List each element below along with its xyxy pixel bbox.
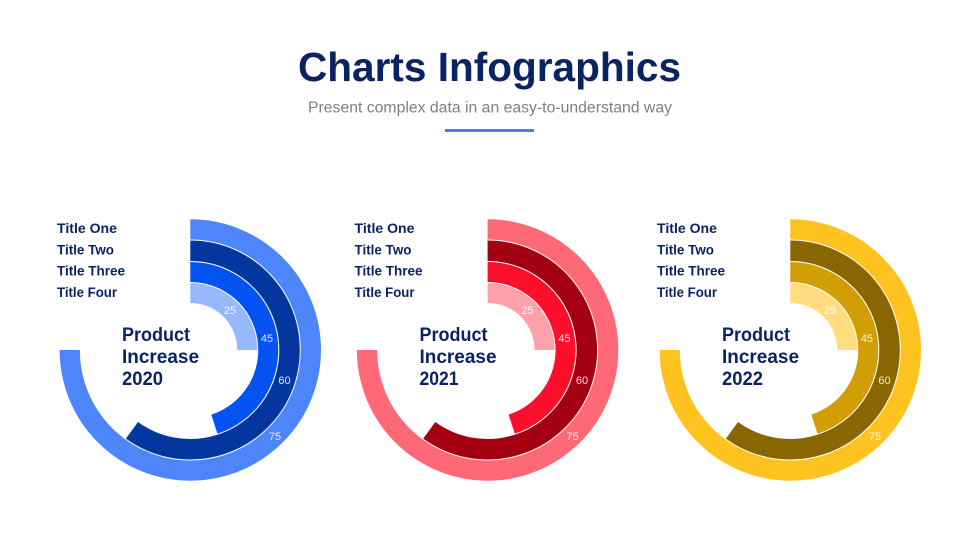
legend titles: Title Two bbox=[657, 242, 714, 258]
center label: Increase bbox=[122, 347, 199, 368]
accent underline bbox=[445, 129, 534, 132]
center label: Increase bbox=[722, 347, 799, 368]
panel: product increase 2022 bbox=[657, 220, 911, 471]
center label bbox=[122, 325, 199, 390]
value labels: 25 bbox=[824, 305, 836, 317]
ring 25 bbox=[190, 293, 247, 350]
value labels: 45 bbox=[261, 333, 273, 345]
value labels: 25 bbox=[224, 305, 236, 317]
ring 60 bbox=[132, 251, 290, 449]
legend titles: Title One bbox=[57, 220, 117, 236]
value labels: 60 bbox=[878, 375, 891, 387]
center label: 2021 bbox=[420, 369, 459, 390]
center label: 2020 bbox=[122, 369, 163, 390]
ring 60 bbox=[732, 251, 890, 449]
ring 75 bbox=[70, 229, 311, 471]
panel: product increase 2021 bbox=[354, 220, 608, 471]
ring 25 bbox=[488, 293, 545, 350]
legend titles: Title Three bbox=[354, 262, 423, 278]
center label bbox=[420, 325, 496, 390]
legend titles: Title Four bbox=[57, 284, 118, 300]
ring 75 bbox=[367, 229, 608, 471]
value labels: 25 bbox=[521, 305, 534, 317]
ring 75 bbox=[670, 229, 911, 471]
center label: 2022 bbox=[722, 369, 763, 390]
legend titles: Title One bbox=[354, 220, 415, 236]
center label: Increase bbox=[420, 347, 496, 368]
value labels: 75 bbox=[566, 431, 579, 443]
center label: Product bbox=[722, 325, 791, 346]
ring 45 bbox=[190, 272, 268, 424]
legend titles: Title Four bbox=[354, 284, 415, 300]
legend titles bbox=[354, 220, 423, 300]
legend titles: Title Two bbox=[354, 242, 412, 258]
legend titles: Title Three bbox=[57, 262, 125, 278]
ring 25 bbox=[790, 293, 847, 350]
value labels: 45 bbox=[558, 333, 571, 345]
legend titles: Title Four bbox=[657, 284, 718, 300]
value labels bbox=[824, 305, 891, 443]
panel: product increase 2020 bbox=[57, 220, 311, 471]
legend titles bbox=[57, 220, 125, 300]
ring 45 bbox=[790, 272, 868, 424]
ring 60 bbox=[429, 251, 587, 449]
value labels bbox=[521, 305, 588, 443]
value labels: 75 bbox=[269, 431, 281, 443]
value labels: 60 bbox=[278, 375, 291, 387]
center label bbox=[722, 325, 799, 390]
legend titles: Title Three bbox=[657, 262, 725, 278]
ring 45 bbox=[488, 272, 566, 424]
legend titles bbox=[657, 220, 725, 300]
value labels bbox=[224, 305, 291, 443]
value labels: 45 bbox=[861, 333, 873, 345]
title: Charts Infographics bbox=[298, 44, 681, 90]
legend titles: Title One bbox=[657, 220, 717, 236]
legend titles: Title Two bbox=[57, 242, 114, 258]
subtitle: Present complex data in an easy-to-understand way bbox=[308, 100, 672, 116]
value labels: 60 bbox=[576, 375, 588, 387]
center label: Product bbox=[122, 325, 191, 346]
center label: Product bbox=[420, 325, 488, 346]
value labels: 75 bbox=[869, 431, 881, 443]
